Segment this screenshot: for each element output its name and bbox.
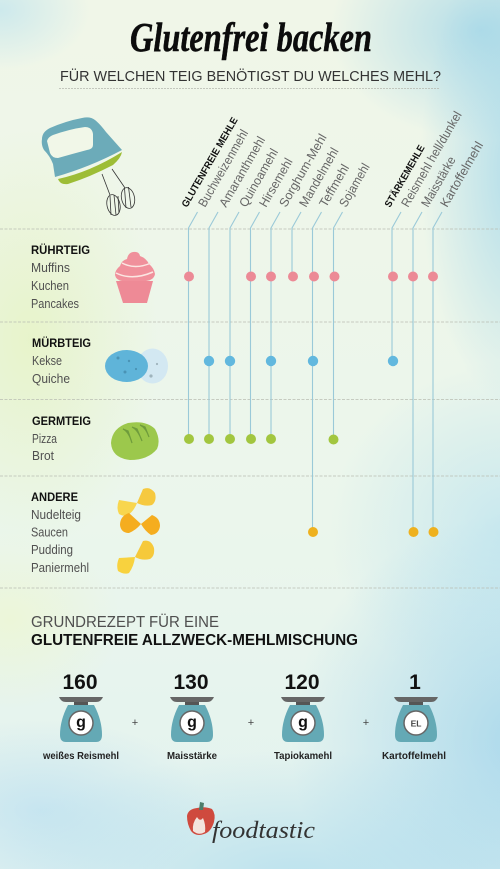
- icon: hand mixer: [42, 117, 137, 217]
- column headings: Maisstärke: [418, 154, 459, 210]
- icon: cupcake: [115, 252, 155, 303]
- connector lines: [188, 212, 442, 532]
- dots: Mürbteig: [204, 356, 398, 366]
- dots: Andere: [308, 527, 438, 537]
- subtitle: FÜR WELCHEN TEIG BENÖTIGST DU WELCHES MEHL?: [60, 67, 441, 85]
- row label: Germteig: Pizza: [32, 432, 57, 446]
- row label: Mürbteig: [32, 335, 91, 386]
- column headings: Sorghum-Mehl: [276, 131, 330, 210]
- row dividers: [0, 229, 500, 588]
- scale: 120 g Tapiokamehl: g: [298, 714, 308, 731]
- row label: Andere: Saucen: [31, 526, 68, 540]
- row label: Andere: Paniermehl: [31, 561, 89, 575]
- scale: 160 g weißes Reismehl: 160: [62, 671, 98, 694]
- scale: 120 g Tapiokamehl: Tapiokamehl: [274, 751, 332, 762]
- column headings: Sojamehl: [336, 161, 373, 210]
- dots: Rührteig: [184, 272, 438, 282]
- column headings: Quinoamehl: [236, 146, 281, 210]
- plus sign: +: [248, 717, 254, 729]
- column headings: Kartoffelmehl: [437, 139, 486, 210]
- scale: 160 g weißes Reismehl: [42, 671, 119, 762]
- scale: 130 g Maisstärke: 130: [173, 671, 209, 694]
- row label: Andere: [31, 490, 89, 575]
- scale: 130 g Maisstärke: Maisstärke: [167, 751, 217, 762]
- recipe heading: GRUNDREZEPT FÜR EINE: [31, 613, 219, 631]
- scale: 1 EL Kartoffelmehl: EL: [411, 718, 421, 728]
- column headings: [180, 109, 486, 210]
- row label: Mürbteig: MÜRBTEIG: [32, 335, 91, 350]
- column headings: Mandelmehl: [296, 145, 342, 210]
- column headings: GLUTENFREIE MEHLE: [180, 115, 241, 210]
- row label: Andere: ANDERE: [31, 490, 78, 504]
- column headings: Hirsemehl: [256, 156, 296, 210]
- column headings: Teffmehl: [316, 162, 352, 210]
- plus sign: +: [132, 717, 138, 729]
- row label: Rührteig: [31, 242, 90, 311]
- row label: Rührteig: Pancakes: [31, 297, 79, 311]
- row label: Germteig: [32, 414, 91, 463]
- column headings: STÄRKEMEHLE: [381, 142, 428, 210]
- logo: foodtastic strawberry: [187, 802, 315, 844]
- recipe heading: GLUTENFREIE ALLZWECK-MEHLMISCHUNG: [31, 632, 358, 649]
- icon: bread: [111, 422, 159, 460]
- scale: 130 g Maisstärke: g: [187, 714, 197, 731]
- row label: Andere: Nudelteig: [31, 508, 81, 522]
- row label: Rührteig: RÜHRTEIG: [31, 242, 90, 257]
- recipe heading: [31, 613, 358, 649]
- row label: Rührteig: Kuchen: [31, 279, 69, 293]
- scale: 120 g Tapiokamehl: [274, 671, 332, 762]
- scale: 1 EL Kartoffelmehl: 1: [409, 671, 421, 694]
- icon: farfalle pasta: [117, 488, 160, 574]
- row label: Rührteig: Muffins: [31, 261, 70, 275]
- scale: 160 g weißes Reismehl: g: [76, 714, 86, 731]
- column headings: Reismehl hell/dunkel: [398, 109, 465, 210]
- row label: Mürbteig: Kekse: [32, 354, 62, 368]
- scale: 120 g Tapiokamehl: 120: [284, 671, 320, 694]
- dots: Germteig: [184, 434, 338, 444]
- scale: 1 EL Kartoffelmehl: Kartoffelmehl: [382, 751, 446, 762]
- plus sign: +: [363, 717, 369, 729]
- column headings: Amaranthmehl: [216, 134, 268, 210]
- icon: cookies: [105, 348, 168, 384]
- title: Glutenfrei backen: [130, 14, 372, 60]
- row label: Germteig: GERMTEIG: [32, 414, 91, 428]
- logo: foodtastic strawberry: foodtastic: [212, 818, 315, 844]
- row label: Germteig: Brot: [32, 449, 54, 463]
- scale: 160 g weißes Reismehl: weißes Reismehl: [42, 751, 119, 762]
- row label: Andere: Pudding: [31, 543, 73, 557]
- scale: 130 g Maisstärke: [167, 671, 217, 762]
- row label: Mürbteig: Quiche: [32, 372, 70, 386]
- scale: 1 EL Kartoffelmehl: [382, 671, 446, 762]
- column headings: Buchweizenmehl: [195, 127, 251, 210]
